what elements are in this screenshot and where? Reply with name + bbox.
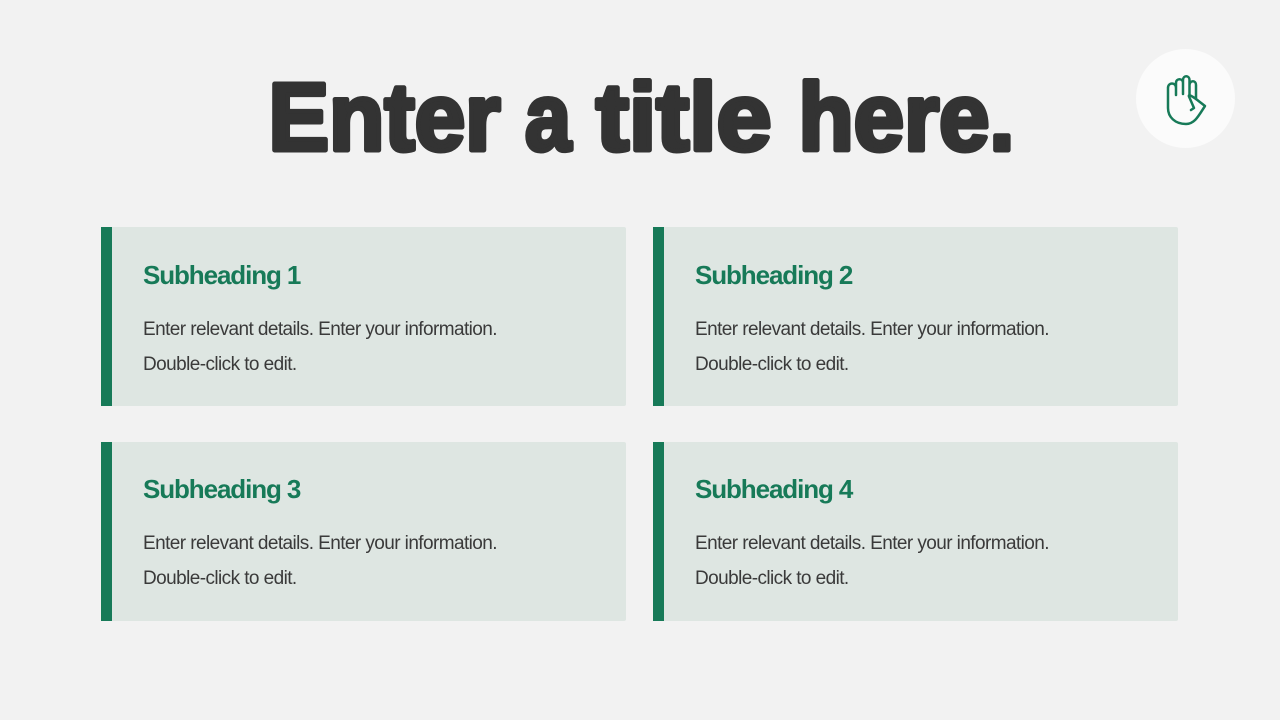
- panel: subheading 4: [653, 442, 1178, 621]
- body text: Double-click to edit.: [143, 568, 297, 588]
- body text: Double-click to edit.: [695, 568, 849, 588]
- title: title: [596, 64, 772, 170]
- accent bar: [653, 227, 664, 406]
- body text: Enter relevant details. Enter your information.: [143, 319, 497, 340]
- accent bar: [101, 227, 112, 406]
- panel: subheading 2: [653, 227, 1178, 406]
- body text: Double-click to edit.: [143, 354, 297, 374]
- title: a: [525, 64, 572, 170]
- title: Enter: [268, 64, 500, 170]
- body text: [143, 319, 497, 374]
- body text: [695, 319, 1049, 374]
- subheading: Subheading 1: [143, 260, 300, 290]
- panel: subheading 3: [101, 442, 626, 621]
- subheading: Subheading 2: [695, 260, 852, 290]
- body text: [695, 533, 1049, 588]
- body text: [143, 533, 497, 588]
- accent bar: [101, 442, 112, 621]
- title: [268, 64, 1014, 170]
- accent bar: [653, 442, 664, 621]
- panel: subheading 1: [101, 227, 626, 406]
- body text: Enter relevant details. Enter your information.: [695, 533, 1049, 554]
- subheading: Subheading 4: [695, 474, 852, 504]
- subheading: Subheading 3: [143, 474, 300, 504]
- body text: Enter relevant details. Enter your information.: [143, 533, 497, 554]
- body text: Double-click to edit.: [695, 354, 849, 374]
- icon: hand in white circle: [1136, 49, 1235, 148]
- title: here.: [798, 64, 1014, 170]
- body text: Enter relevant details. Enter your information.: [695, 319, 1049, 340]
